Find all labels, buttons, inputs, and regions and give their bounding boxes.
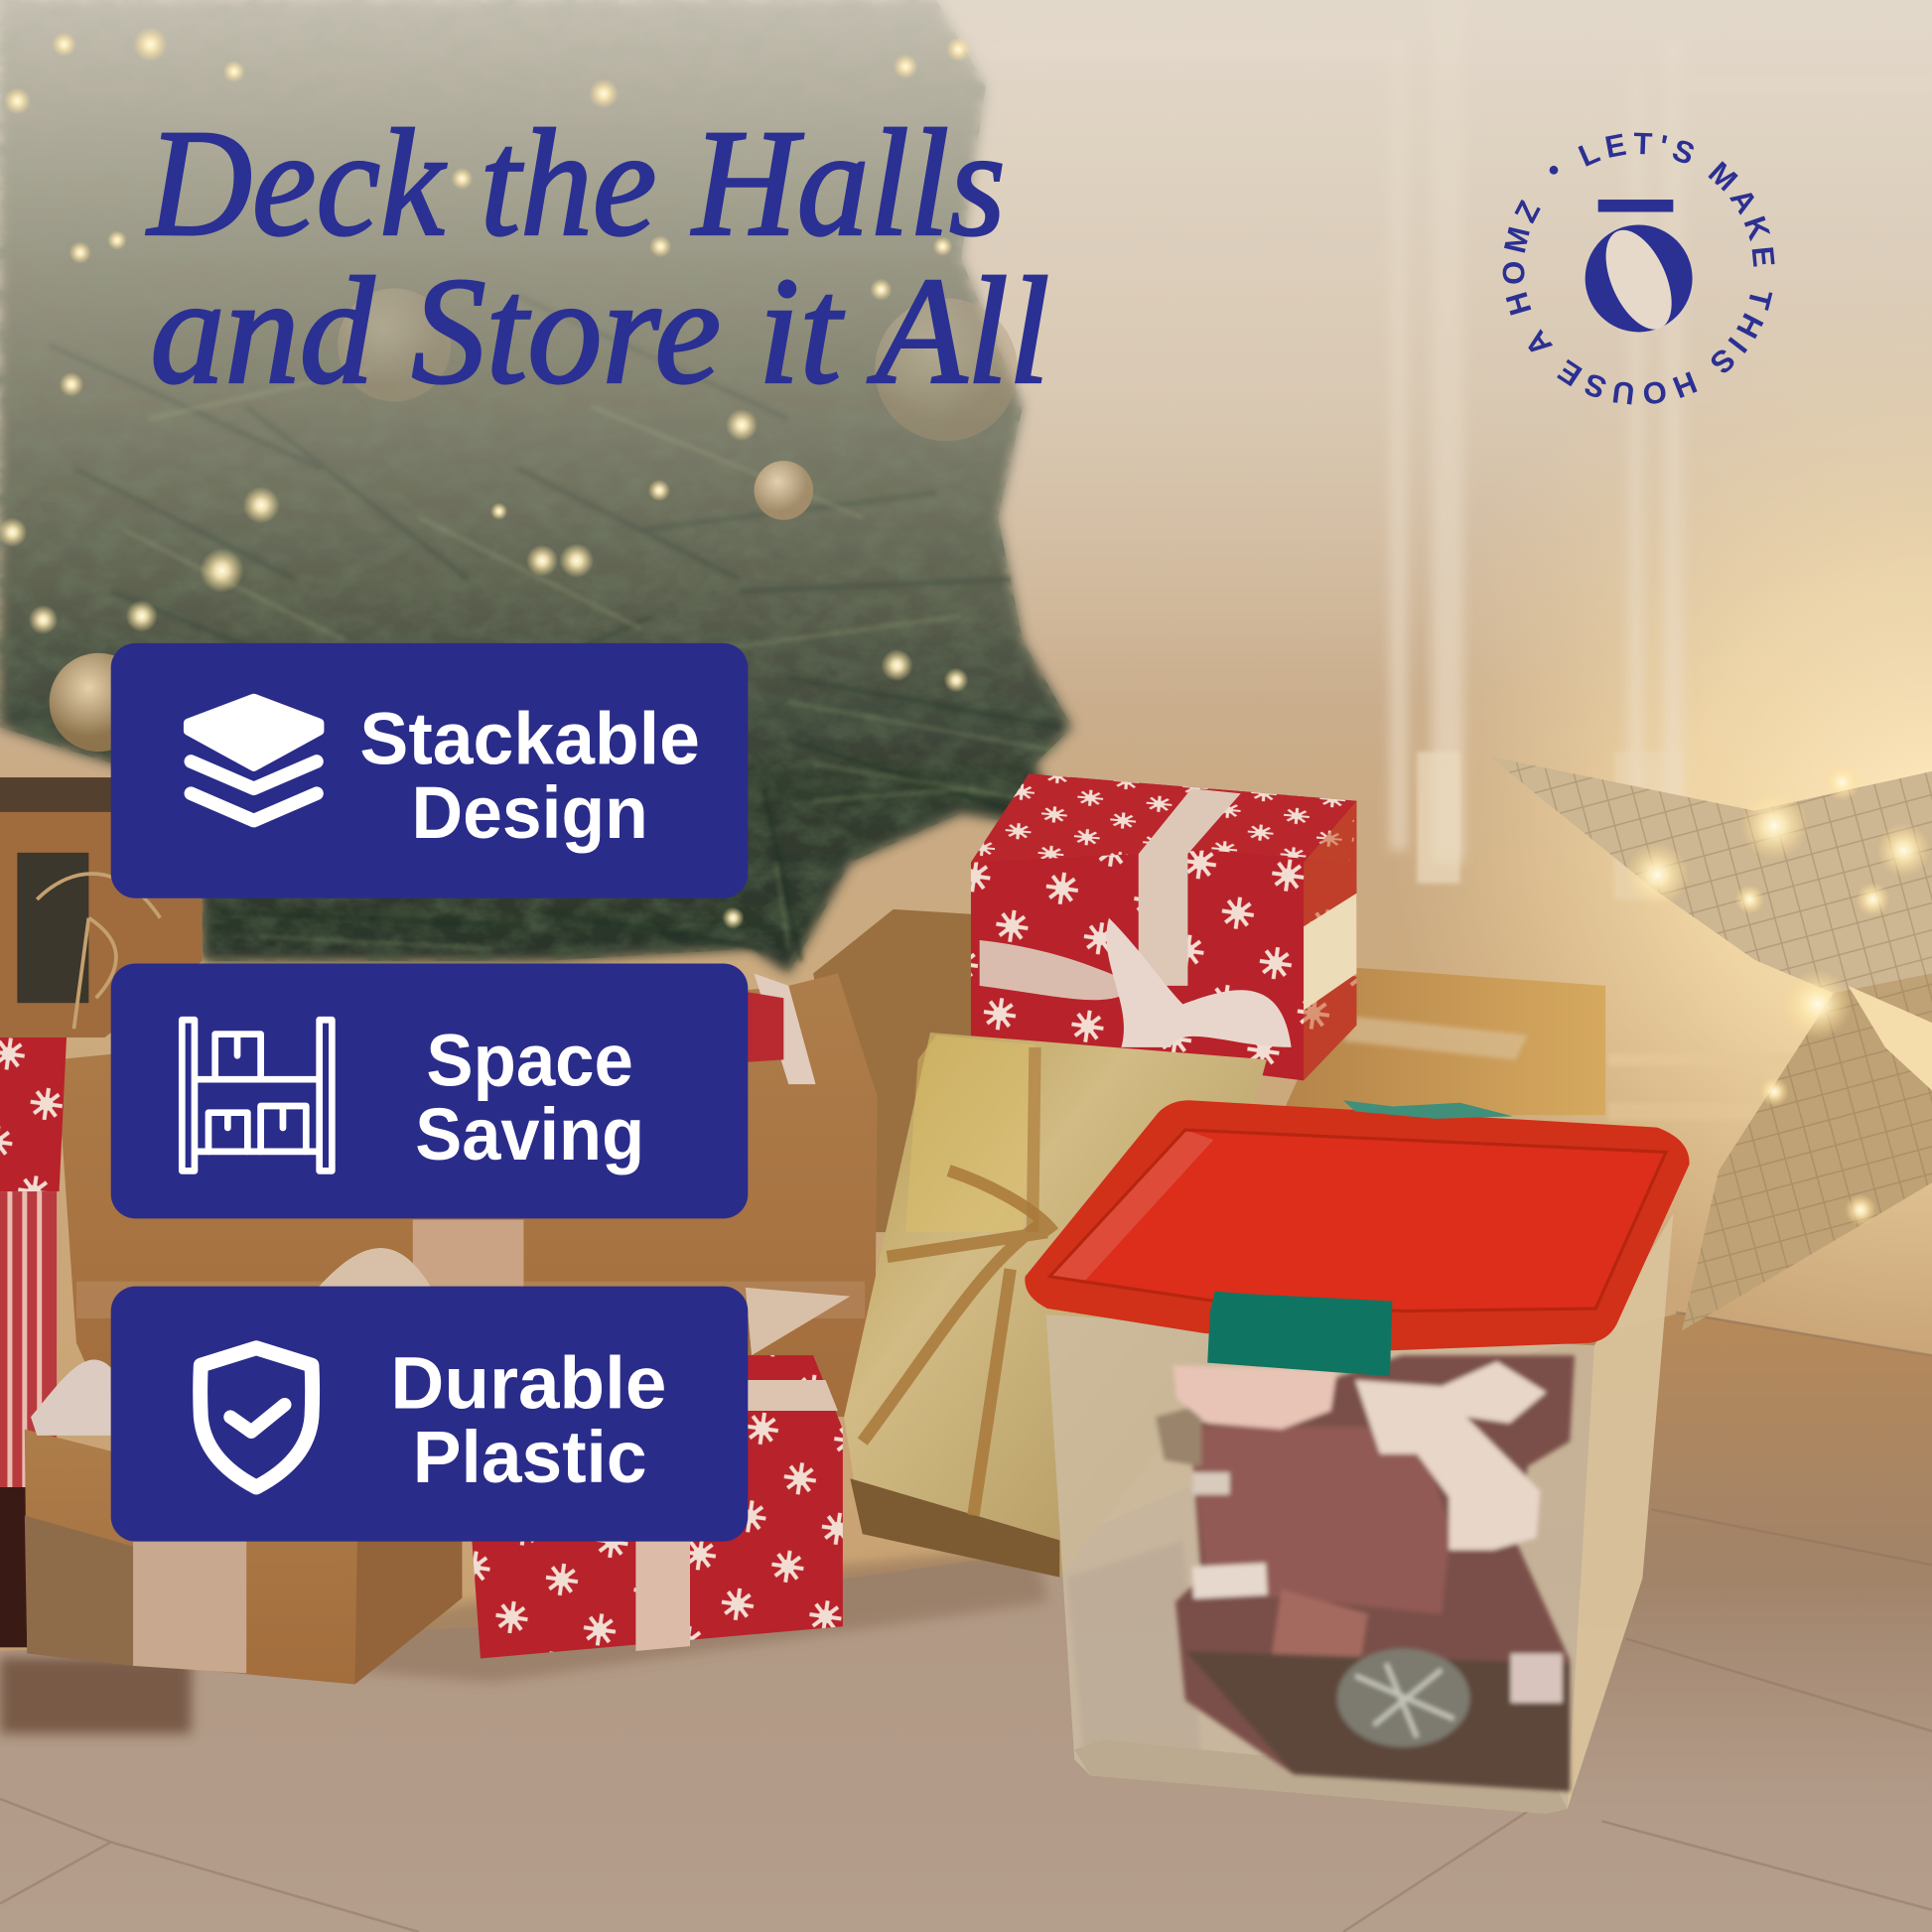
upper red gift: [971, 773, 1356, 1080]
brown gift: [0, 777, 203, 1037]
logo badge: [1503, 133, 1775, 405]
box body: [1046, 1213, 1673, 1814]
circular tagline: LET'S MAKE THIS HOUSE A HOMZ: [1503, 133, 1775, 405]
label: Durable: [390, 1342, 666, 1425]
title: [146, 99, 1049, 416]
logo mark: [1586, 200, 1693, 340]
label: Design: [412, 771, 648, 854]
star lamp: [1489, 757, 1932, 1330]
gold gift: [844, 1033, 1267, 1578]
label: Stackable: [359, 697, 700, 779]
lower red gift: [472, 1288, 850, 1658]
christmas tree: [0, 0, 1084, 986]
title: Deck the Halls: [146, 99, 1006, 268]
panel: space saving: [111, 964, 748, 1218]
title: and Store it All: [150, 247, 1049, 416]
tree haze overlay: [0, 0, 1932, 788]
icon: stacked layers: [189, 699, 319, 821]
label: Saving: [415, 1093, 644, 1175]
icon: shelf with boxes: [182, 1020, 332, 1171]
gifts: [0, 773, 1605, 1733]
product: storage box: [1025, 1100, 1690, 1814]
label: Plastic: [413, 1416, 647, 1498]
lower kraft gift: [25, 1360, 462, 1685]
panel: stackable design: [111, 643, 748, 898]
panel: durable plastic: [111, 1287, 748, 1542]
label: Space: [426, 1019, 633, 1101]
box latch: [1207, 1292, 1392, 1376]
box contents: gingerbread figure: [1156, 1355, 1575, 1792]
icon: shield with check: [201, 1348, 313, 1487]
box lid: [1025, 1100, 1690, 1350]
tree lights: [0, 27, 971, 929]
